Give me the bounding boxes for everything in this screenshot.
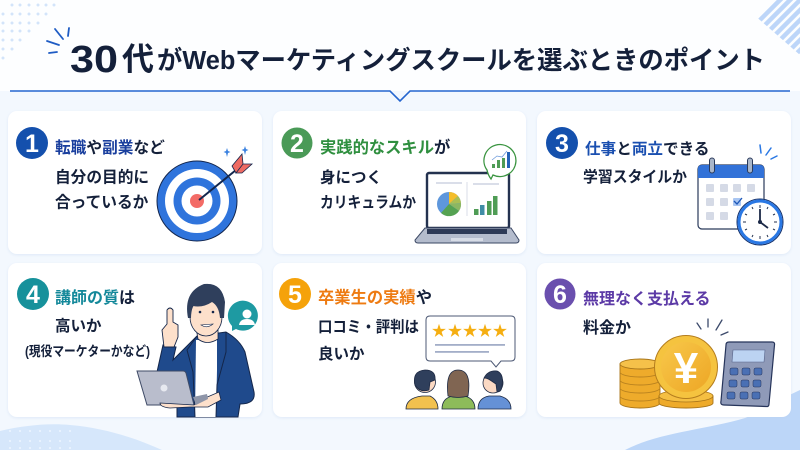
card 6 text: 無理なく支払える bbox=[583, 289, 711, 308]
icon: review speech bubble: ★ bbox=[432, 324, 446, 340]
title: 30 bbox=[70, 39, 118, 81]
icon: three people bbox=[406, 370, 511, 409]
card 3 background bbox=[537, 111, 791, 254]
icon: review speech bubble: ★ bbox=[463, 324, 477, 340]
card 3 text: 仕事と両立できる bbox=[585, 139, 710, 158]
icon: instructor with laptop bbox=[137, 284, 258, 417]
card 1 text: 転職や副業など bbox=[55, 139, 165, 157]
card 3 text: 学習スタイルか bbox=[583, 167, 687, 186]
badge 6 bbox=[544, 278, 576, 310]
card 4 text: 講師の質は bbox=[55, 288, 135, 307]
card 4 text bbox=[25, 288, 150, 359]
card 4 text: 高いか bbox=[55, 317, 102, 335]
panel: point 6 bbox=[537, 263, 791, 417]
card 5 background bbox=[273, 263, 526, 417]
panel: point 3 bbox=[537, 111, 791, 254]
icon: yen coins: ¥ bbox=[674, 344, 699, 393]
panel: point 2 bbox=[273, 111, 526, 254]
card 5 text bbox=[318, 289, 432, 363]
card 1 text: 合っているか bbox=[55, 194, 149, 212]
badge 4: 4 bbox=[26, 281, 40, 309]
card 6 text bbox=[583, 289, 711, 337]
card 5 text: 卒業生の実績や bbox=[318, 289, 432, 307]
badge 4 bbox=[17, 278, 49, 310]
card 5 text: 良いか bbox=[318, 344, 365, 363]
background wave: bottom right bbox=[625, 390, 800, 450]
badge 2: 2 bbox=[290, 130, 304, 158]
panel: point 1 bbox=[8, 111, 262, 254]
background decoration: top-right stripes bbox=[758, 0, 800, 54]
card 4 text: (現役マーケターかなど) bbox=[25, 344, 150, 359]
icon: calendar and clock bbox=[698, 145, 783, 245]
card 2 text: 実践的なスキルが bbox=[320, 138, 450, 157]
title bbox=[70, 39, 765, 81]
card 4 background bbox=[8, 263, 262, 417]
card 1 text bbox=[55, 139, 165, 212]
badge 5 bbox=[279, 278, 311, 310]
badge 1: 1 bbox=[25, 130, 39, 158]
icon: review speech bubble bbox=[426, 316, 515, 367]
card 2 text: カリキュラムか bbox=[320, 194, 416, 212]
icon: calculator bbox=[721, 342, 775, 407]
header divider with notch bbox=[10, 91, 790, 101]
title: 代 bbox=[122, 41, 154, 77]
badge 6: 6 bbox=[553, 281, 567, 309]
title: がWebマーケティングスクールを選ぶときのポイント bbox=[157, 46, 765, 75]
panel: point 4 bbox=[8, 263, 262, 417]
card 5 text: 口コミ・評判は bbox=[318, 318, 419, 336]
card 6 text: 料金か bbox=[583, 318, 631, 337]
card 2 text bbox=[320, 138, 450, 212]
badge 1 bbox=[16, 127, 48, 159]
card 2 text: 身につく bbox=[320, 168, 382, 186]
icon: review speech bubble: ★ bbox=[493, 324, 507, 340]
badge 3 bbox=[546, 127, 578, 159]
icon: yen coins bbox=[620, 319, 728, 408]
card 3 text bbox=[583, 139, 710, 186]
icon: laptop with charts bbox=[415, 145, 519, 243]
badge 2 bbox=[282, 128, 312, 158]
card 1 background bbox=[8, 111, 262, 254]
panel: point 5 bbox=[273, 263, 526, 417]
icon: review speech bubble: ★ bbox=[448, 324, 462, 340]
card 2 background bbox=[273, 111, 526, 254]
card 6 background bbox=[537, 263, 791, 417]
icon: title sparkle bbox=[47, 28, 69, 53]
badge 5: 5 bbox=[288, 281, 302, 309]
background wave: bottom left bbox=[0, 424, 162, 450]
badge 3: 3 bbox=[555, 130, 569, 158]
icon: review speech bubble: ★ bbox=[478, 324, 492, 340]
icon: target with arrow bbox=[157, 146, 252, 241]
background decoration: top-left dots bbox=[2, 4, 56, 60]
card 1 text: 自分の目的に bbox=[55, 168, 149, 186]
